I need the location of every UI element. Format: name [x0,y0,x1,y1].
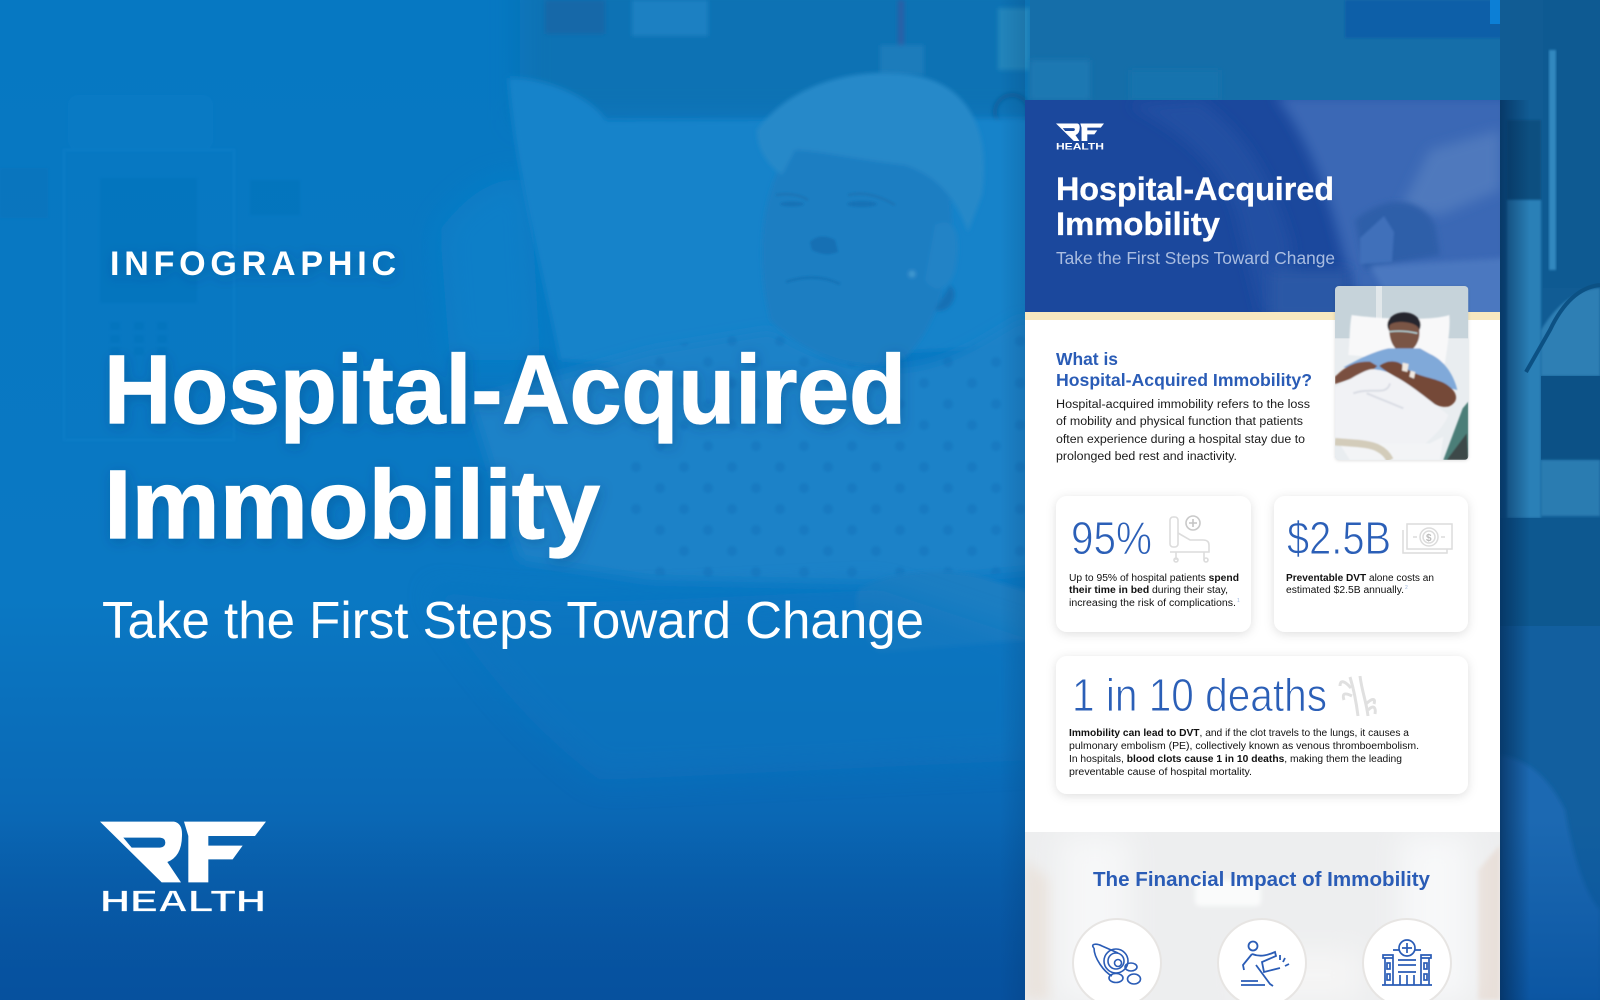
infographic preview panel [1025,95,1510,1000]
right-hand equipment and bed [1500,0,1600,1000]
icon: banknote [1403,524,1452,553]
icon: hospital bed [1170,516,1209,562]
intro paragraph: often experience during a hospital stay due to [1056,434,1305,446]
eyebrow: INFOGRAPHIC: INFOGRAPHIC [110,245,396,283]
stat text [1069,728,1419,778]
stat text: increasing the risk of complications. [1069,598,1236,609]
intro paragraph: prolonged bed rest and inactivity. [1056,451,1237,463]
main subtitle: Take the First Steps Toward Change [102,592,924,650]
section: financial impact [1025,832,1500,1000]
stat card: 1 in 10 deaths [1056,656,1468,794]
stat card: 95% [1056,496,1251,632]
icon: hospital building [1363,919,1451,1000]
logo: RF Health [100,822,266,919]
bottom fade [0,820,1600,1000]
footnote marker: 2 [1405,585,1408,591]
panel logo [1056,123,1104,151]
panel header [1025,95,1510,320]
woman and bed, softly blurred [473,0,1030,646]
logo: RF Health: HEALTH [100,885,266,919]
stat number: $2.5B [1287,512,1391,564]
intro heading: What is [1056,349,1118,369]
gown with flower print [470,318,1035,585]
stat number: 95% [1071,512,1152,564]
panel title: Hospital-Acquired [1056,171,1334,207]
stat text: Preventable DVT alone costs an [1286,573,1434,584]
main title: Immobility [104,450,600,559]
patient head [757,73,984,365]
panel title [1056,171,1334,242]
hand and lower blanket [858,574,1025,642]
stat text: Immobility can lead to DVT , and if the clot travels to the lungs, it causes a [1069,728,1409,739]
icon: person slipping [1218,919,1306,1000]
stat text: pulmonary embolism (PE), collectively known as venous thromboembolism. [1069,741,1419,752]
panel title: Immobility [1056,206,1220,242]
stat text [1286,573,1434,596]
header photo: blurred arm and pulse oximeter [1258,100,1500,312]
intro heading [1056,349,1312,390]
intro paragraph [1056,399,1310,463]
intro heading: Hospital-Acquired Immobility? [1056,370,1312,390]
photo: patient in hospital bed [1335,286,1468,460]
panel logo: HEALTH [1056,141,1104,151]
stat text: their time in bed during their stay, [1069,585,1228,596]
main title [104,335,906,559]
blurred corridor background [1025,835,1500,1000]
intro paragraph: Hospital-acquired immobility refers to the loss [1056,399,1310,411]
patient face features [776,194,895,284]
stat number: 1 in 10 deaths [1072,669,1327,721]
stat text: estimated $2.5B annually. [1286,585,1404,596]
panel subtitle: Take the First Steps Toward Change [1056,248,1335,268]
cream divider [1025,312,1500,320]
footnote marker: 1 [1237,598,1240,604]
section heading: The Financial Impact of Immobility [1093,869,1431,891]
stat text: Up to 95% of hospital patients spend [1069,573,1239,584]
stat text: In hospitals, blood clots cause 1 in 10 deaths , making them the leading [1069,754,1402,765]
equipment above the panel [1030,0,1514,100]
pillow and bed surface [440,179,540,360]
soft shadow left of the panel [1000,0,1025,1000]
shadow right of the panel [1500,100,1530,1000]
main title: Hospital-Acquired [104,335,906,444]
stat text [1069,573,1239,609]
icon: vein [1340,676,1375,716]
stat card: $2.5B: $ [1426,533,1432,544]
stat text: preventable cause of hospital mortality. [1069,767,1252,778]
stat card: $2.5B [1274,496,1468,632]
intro paragraph: of mobility and physical function that patients [1056,416,1303,428]
infusion pumps at left [0,95,300,440]
icon: blood cells [1073,919,1161,1000]
